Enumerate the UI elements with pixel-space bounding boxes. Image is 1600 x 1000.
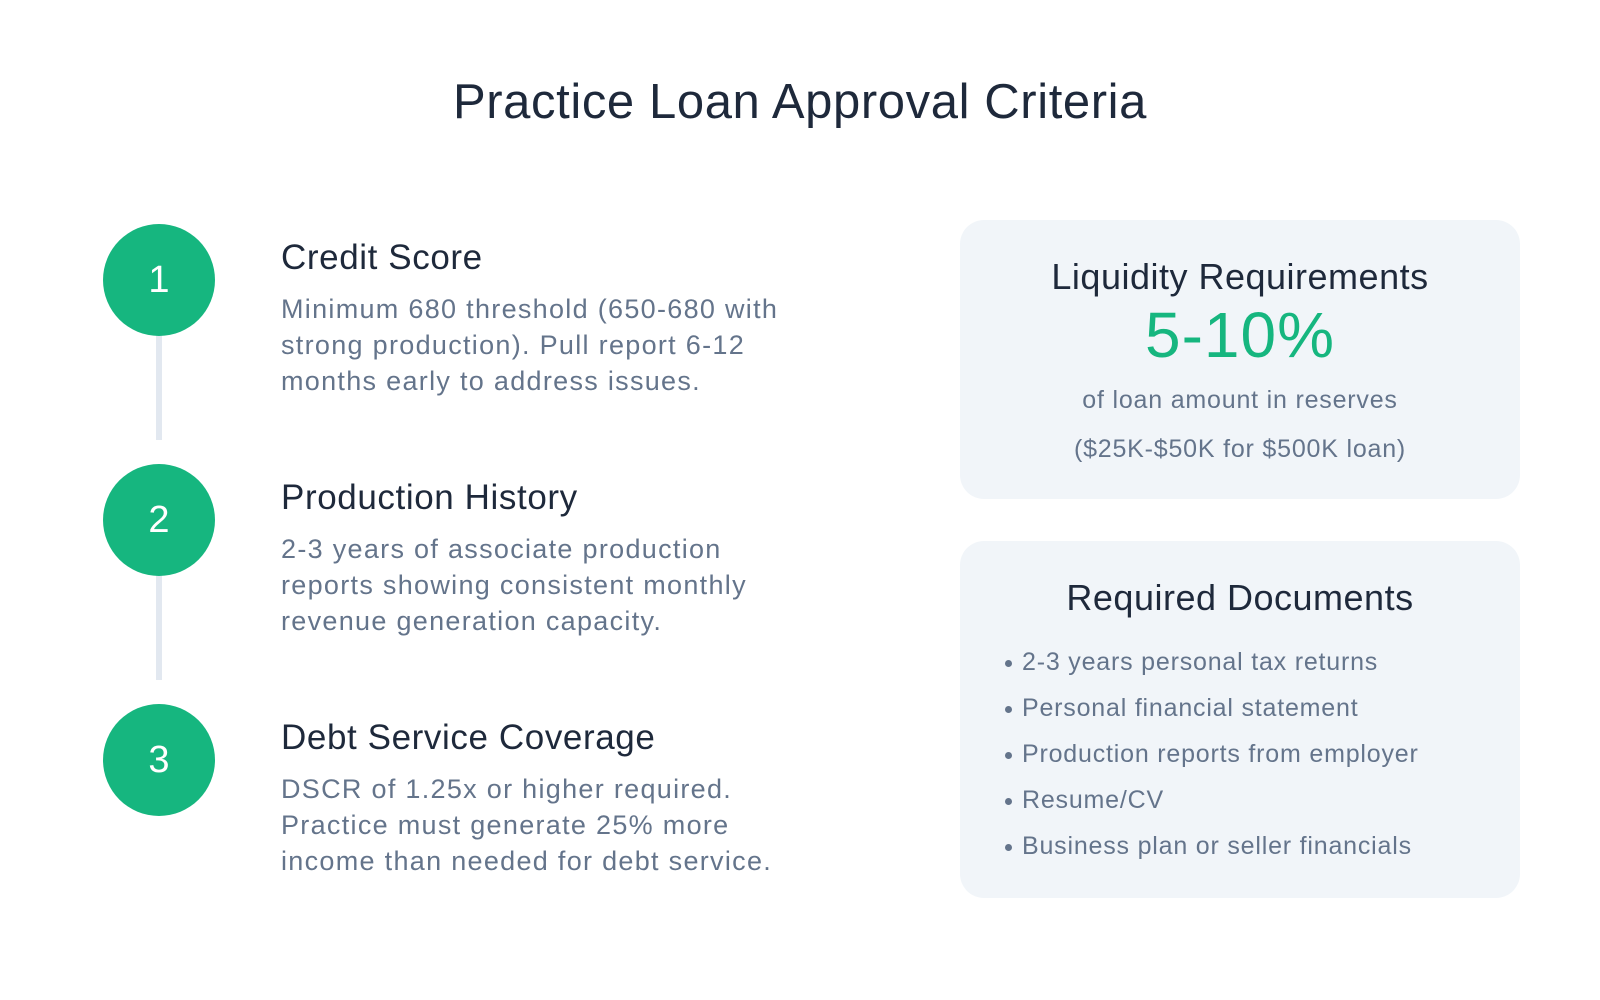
panel: required documents	[960, 541, 1520, 898]
connector 2-3	[156, 575, 162, 680]
step 2: production history: reports showing consistent monthly	[281, 570, 747, 600]
step 3 circle	[103, 704, 215, 816]
step 1: credit score: months early to address issues.	[281, 366, 701, 396]
document list: Production reports from employer	[1022, 740, 1419, 768]
step 1 circle	[103, 224, 215, 336]
connector 1-2	[156, 335, 162, 440]
step 1: credit score	[281, 238, 778, 396]
step 2: production history: revenue generation capacity.	[281, 606, 662, 636]
step 2 circle	[103, 464, 215, 576]
panel: required documents: Required Documents	[1066, 577, 1414, 618]
document list	[1005, 648, 1419, 860]
panel: liquidity requirements: Liquidity Requirements	[1051, 256, 1429, 297]
step 2: production history: 2-3 years of associate production	[281, 534, 722, 564]
step 2: production history	[281, 478, 747, 636]
document list: Personal financial statement	[1022, 694, 1358, 722]
step 3 circle: 3	[148, 738, 170, 780]
panel: liquidity requirements: ($25K-$50K for $500K loan)	[1074, 435, 1406, 463]
document list: Resume/CV	[1022, 786, 1164, 814]
step 3: debt service coverage: Debt Service Coverage	[281, 718, 655, 757]
step 1: credit score: strong production). Pull report 6-12	[281, 330, 745, 360]
step 3: debt service coverage: income than needed for debt service.	[281, 846, 772, 876]
document list: Business plan or seller financials	[1022, 832, 1412, 860]
step 2: production history: Production History	[281, 478, 578, 517]
step 3: debt service coverage: Practice must generate 25% more	[281, 810, 730, 840]
document list: 2-3 years personal tax returns	[1022, 648, 1378, 676]
step 1 circle: 1	[148, 258, 170, 300]
step 2 circle: 2	[148, 498, 170, 540]
panel: liquidity requirements	[960, 220, 1520, 499]
step 1: credit score: Credit Score	[281, 238, 483, 277]
step 3: debt service coverage: DSCR of 1.25x or higher required.	[281, 774, 732, 804]
big stat: 5-10%	[1145, 299, 1335, 371]
step 3: debt service coverage	[281, 718, 772, 876]
panel: liquidity requirements: of loan amount in reserves	[1082, 386, 1398, 414]
step 1: credit score: Minimum 680 threshold (650-680 with	[281, 294, 778, 324]
title: Practice Loan Approval Criteria	[453, 75, 1147, 129]
